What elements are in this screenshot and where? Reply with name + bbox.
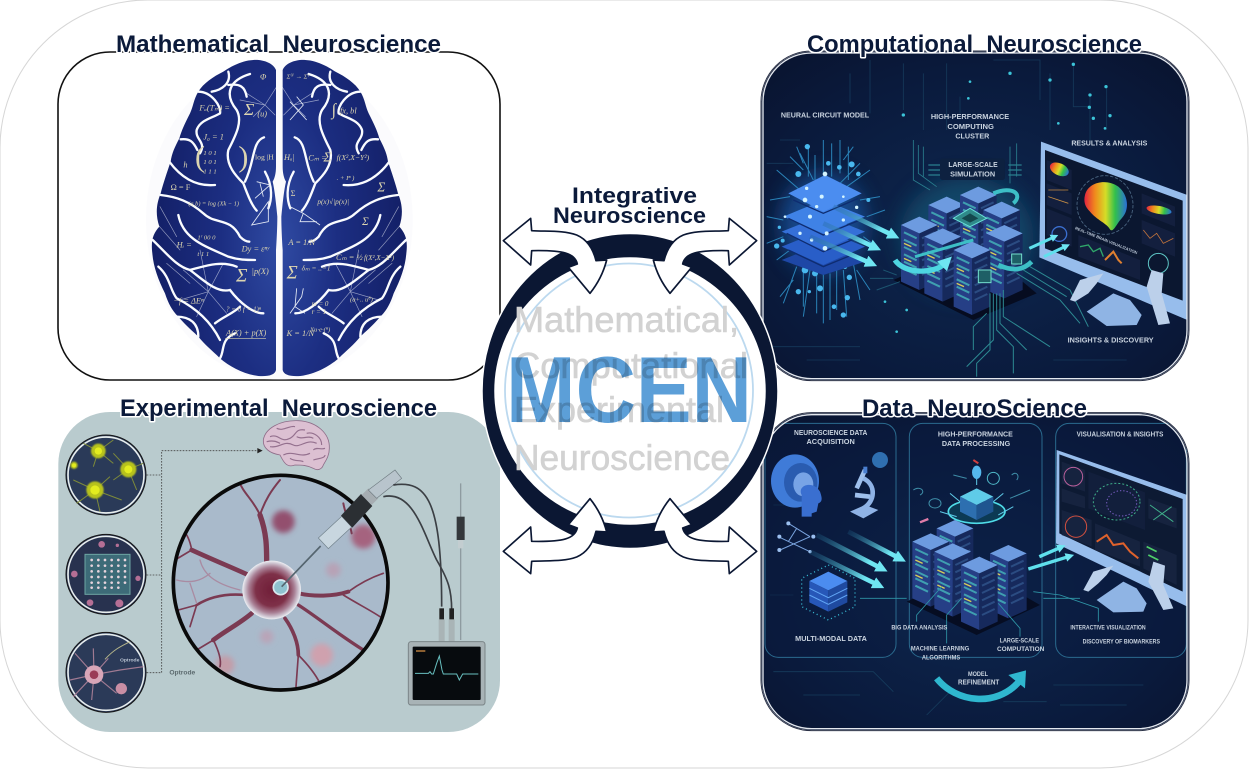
illustration: brain with equations: (u): [257, 110, 267, 119]
hub background words: Experimental: [514, 389, 724, 430]
illustration: brain with equations: fx, bl: [340, 106, 357, 115]
central hub: [482, 234, 778, 548]
illustration: brain with equations: ): [238, 141, 248, 174]
label: large-scale simulation: [948, 162, 998, 176]
arrow: bottom left double-headed: [503, 499, 607, 574]
illustration: brain with equations: (a,b) = log (Xk − 1): [188, 201, 239, 208]
illustration: brain with equations: r = 1: [312, 308, 326, 316]
big magnified neuron: [173, 475, 388, 690]
label: neural circuit model: NEURAL CIRCUIT MODEL: [781, 111, 869, 120]
label: machine learning algorithms: [911, 646, 969, 661]
illustration: brain with equations: A = 1/N: [287, 238, 316, 247]
heading: integrative neuroscience: Integrative: [572, 183, 697, 208]
processing servers: [907, 520, 1040, 635]
circuit traces background: [767, 60, 1127, 360]
hub background words: Computational: [514, 345, 748, 386]
illustration: brain with equations: Σ: [235, 266, 248, 287]
label: machine learning algorithms: MACHINE LEARNING: [911, 646, 969, 653]
illustration: brain with equations: ? = 0 f = 1)ⁿ: [226, 306, 262, 314]
label: large-scale computation: [997, 637, 1045, 653]
hub light-blue circle: [505, 264, 753, 518]
illustration: brain with equations: ∫: [331, 100, 338, 120]
probe: [282, 470, 402, 587]
inset: optrode neuron: Optrode: [120, 658, 140, 664]
icon: MRI scanner: [771, 454, 822, 517]
icon: data cube: [802, 565, 855, 620]
hub background words: [514, 299, 748, 478]
sub-panel: processing: [909, 423, 1042, 657]
illustration: brain with equations: A(X) + p(X): [225, 328, 267, 337]
central data core: [913, 460, 1030, 523]
arrows to monitor: [1029, 237, 1065, 257]
illustration: brain with equations: Ω = F: [171, 183, 191, 192]
label: model refinement: [958, 672, 1000, 687]
illustration: brain with equations: Xu·e·(ⁿ): [309, 327, 331, 334]
illustration: brain with equations: Σ: [243, 100, 255, 119]
glow behind models: [780, 173, 1033, 297]
illustration: brain with equations: J₀ = 1: [203, 132, 224, 141]
illustration: brain with equations: Cₘ = ½: [336, 253, 364, 262]
icon: small brain: [263, 421, 329, 470]
illustration: brain with equations: m = 0: [312, 300, 329, 308]
label: big data analysis: BIG DATA ANALYSIS: [891, 624, 948, 631]
recording electrode: [457, 483, 465, 640]
panel frame: mathematical: [58, 52, 500, 380]
heading: mathematical neuroscience: Mathematical Neuroscience: [116, 31, 441, 58]
label: insights and discovery: INSIGHTS & DISCOVERY: [1068, 335, 1154, 344]
illustration: brain with equations: (a+.. u⁸): [350, 297, 374, 304]
sub-panel: acquisition: [765, 423, 896, 657]
label: high-performance computing cluster: COMPUTING: [947, 122, 994, 131]
label: large-scale simulation: SIMULATION: [950, 169, 996, 178]
label: high-performance computing cluster: HIGH-PERFORMANCE: [931, 112, 1009, 121]
illustration: brain with equations: Σ: [361, 216, 369, 228]
illustration: brain with equations: K = 1/N: [286, 329, 314, 338]
panel background: experimental: [58, 412, 500, 732]
results monitor: REAL-TIME BRAIN VISUALIZATION: [1074, 225, 1138, 255]
illustration: brain with equations: Cₘ =: [308, 154, 327, 163]
inset: fluorescent neurons: [66, 435, 146, 515]
model refinement arrow: [937, 670, 1026, 699]
inset: microelectrode array: [66, 534, 146, 614]
illustration: brain with equations: Σ: [286, 262, 298, 283]
neural circuit model: [767, 140, 885, 323]
label: high-performance data processing: HIGH-PERFORMANCE: [938, 430, 1013, 439]
panel background: computational: [762, 52, 1188, 380]
arrows into processing: [810, 532, 898, 584]
illustration: brain with equations: . + Iⁿ ): [337, 175, 355, 182]
illustration: brain with equations: 1 0 1: [203, 150, 217, 157]
hub white disc: [494, 257, 766, 525]
panel: mathematical neuroscience: [58, 52, 500, 380]
label: model refinement: MODEL: [968, 672, 988, 678]
panel art: data pipeline: [765, 423, 1187, 715]
panel outline: data: [761, 413, 1189, 731]
heading: experimental neuroscience: Experimental Neuroscience: [120, 395, 437, 422]
hub background words: Mathematical,: [514, 299, 739, 340]
inset: optrode neuron: [66, 632, 146, 712]
illustration: brain with equations: 1 0 1: [203, 159, 217, 166]
analysis monitor: [1056, 450, 1187, 612]
illustration: brain with equations: Dy = εⁿʸ: [241, 245, 270, 254]
label: optrode: Optrode: [169, 669, 196, 676]
illustration: brain with equations: Fₐ(Tₘ) =: [198, 104, 230, 113]
cable connectors: [439, 608, 455, 641]
label: high-performance computing cluster: CLUSTER: [955, 132, 990, 141]
label: multi-modal data: MULTI-MODAL DATA: [795, 634, 867, 643]
label: neuroscience data acquisition: ACQUISITION: [806, 437, 855, 446]
illustration: brain with equations: Hₐ|: [283, 153, 295, 162]
heading: data neuroscience: Data NeuroScience: [862, 395, 1087, 422]
illustration: brain with equations: |p(X): [252, 267, 269, 276]
label: large-scale computation: COMPUTATION: [997, 646, 1045, 653]
illustration: brain with equations: Σ: [291, 189, 296, 198]
illustration: brain with equations: f(X²,X−X²): [364, 254, 395, 262]
icon: microscope: [850, 467, 878, 518]
label: machine learning algorithms: ALGORITHMS: [922, 654, 961, 661]
dashed connectors: [147, 451, 258, 673]
panel art: computational pipeline: [767, 60, 1187, 377]
panel: computational neuroscience: [761, 51, 1189, 381]
illustration: brain with equations: Hᵢ =: [176, 240, 192, 249]
heading: integrative neuroscience: [553, 183, 706, 228]
illustration: brain with equations: −f = ΔEⁿ: [173, 296, 204, 305]
probe cables: [383, 484, 452, 610]
panel: data neuroscience: [761, 413, 1189, 731]
heading: integrative neuroscience: Neuroscience: [553, 203, 706, 228]
label: neuroscience data acquisition: [794, 430, 868, 446]
illustration: brain with equations: f(X²,X−Y²): [337, 153, 370, 162]
illustration: brain with equations: Σᴺ → Σᵗ: [286, 73, 310, 80]
arrow: top right double-headed: [653, 218, 757, 293]
heading: computational neuroscience: Computational Neuroscience: [807, 31, 1142, 58]
illustration: brain with equations: δₘ = ..=1: [302, 264, 331, 273]
label: high-performance data processing: [938, 432, 1013, 446]
arrows into cluster: [810, 207, 892, 263]
label: large-scale simulation: LARGE-SCALE: [948, 160, 998, 169]
panel background: data: [762, 413, 1188, 730]
arrow: top left double-headed: [503, 218, 607, 293]
leader lines: [860, 587, 1098, 643]
label: discovery of biomarkers: DISCOVERY OF BIOMARKERS: [1083, 638, 1160, 645]
circuit background: [770, 505, 1143, 715]
label: model refinement: REFINEMENT: [958, 678, 1000, 687]
illustration: brain with equations: 1ʳ 00 0: [197, 234, 216, 241]
hub background words: Neuroscience: [514, 437, 730, 478]
oscilloscope: [408, 642, 485, 705]
illustration: brain with equations: log |H: [255, 152, 274, 161]
label: results and analysis: RESULTS & ANALYSIS: [1071, 138, 1147, 147]
hub acronym: MCEN: [506, 337, 752, 442]
icon: network graph: [777, 521, 815, 553]
illustration: brain with equations: (: [195, 141, 205, 174]
panel: experimental neuroscience: [58, 412, 500, 732]
illustration: brain with equations: Σ: [322, 151, 332, 166]
illustration: brain with equations: h: [183, 160, 188, 169]
hub ring: [482, 234, 778, 548]
label: visualisation and insights: VISUALISATION & INSIGHTS: [1077, 430, 1163, 439]
icon: small brain: [872, 452, 888, 468]
connector arrowhead: [257, 448, 263, 453]
results monitor: [1039, 142, 1187, 326]
arrow: bottom right double-headed: [653, 499, 757, 574]
illustration: brain with equations: 1 1 1: [203, 168, 217, 175]
label: large-scale computation: LARGE-SCALE: [1000, 637, 1039, 644]
illustration: brain with equations: p(x)√|p(x)|: [316, 197, 349, 206]
label: high-performance data processing: DATA PROCESSING: [942, 439, 1010, 448]
label: high-performance computing cluster: [931, 114, 1009, 138]
label: interactive visualization: INTERACTIVE VISUALIZATION: [1070, 624, 1146, 631]
illustration: brain with equations: t 1 1: [197, 251, 209, 258]
sub-panel: visualisation: [1056, 423, 1186, 657]
computing cluster: [893, 187, 1037, 320]
panel outline: computational: [761, 51, 1189, 381]
circuit trunk below cluster: [870, 267, 1088, 377]
label: neuroscience data acquisition: NEUROSCIENCE DATA: [794, 428, 868, 437]
illustration: brain with equations: Φ: [260, 72, 267, 81]
arrows to monitor: [1028, 548, 1068, 569]
illustration: brain with equations: Σ: [376, 180, 385, 195]
illustration: brain with equations: [146, 60, 413, 380]
